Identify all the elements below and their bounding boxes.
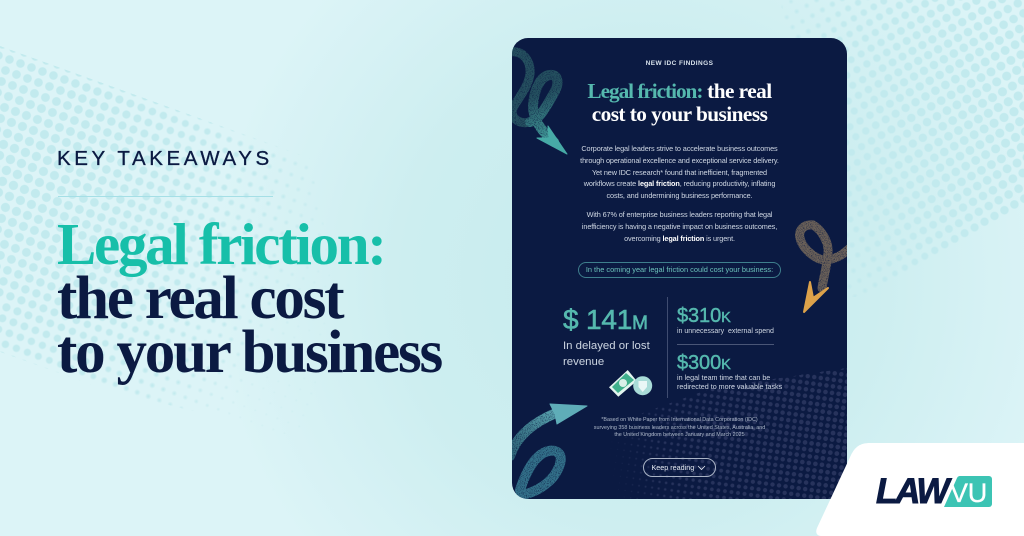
stat label: delayed or lost revenue: revenue [563,356,604,368]
intro paragraph: Corporate legal leaders strive to accelerate business outcomes [581,144,778,153]
card heading: cost to your business [592,102,767,126]
arrow head: blue [550,404,587,424]
intro paragraph: costs, and undermining business performance. [606,191,752,200]
footnote: *Based on White Paper from International Data Corporation (IDC) [601,417,758,423]
arrow: right amber [800,225,852,288]
arrow head: teal [537,126,567,154]
main heading [57,211,442,386]
card heading: Legal friction: the real [587,79,772,103]
stat label: delayed or lost revenue [563,340,650,368]
stat label: legal team time: in legal team time that can be [677,374,770,382]
vertical divider [667,297,668,398]
button: keep reading [643,458,716,477]
footnote: surveying 358 business leaders across the United States, Australia, and [594,425,765,431]
divider line [58,196,273,197]
second paragraph: inefficiency is having a negative impact on business outcomes, [582,222,777,231]
intro paragraph: Yet new IDC research* found that inefficient, fragmented [592,168,767,176]
horizontal divider [677,344,774,345]
white logo corner panel [816,443,1024,536]
button: keep reading: Keep reading [652,463,694,472]
icon: money and coin [609,370,652,397]
panel: dark report card [512,38,847,499]
stat: 141M: $ 141M [563,304,648,335]
footnote: the United Kingdom between January and March 2025 [614,432,745,438]
card heading [587,79,772,126]
intro paragraph: workflows create legal friction, reducing productivity, inflating [584,179,775,188]
second paragraph: overcoming legal friction is urgent. [624,234,735,242]
eyebrow: new IDC findings: NEW IDC FINDINGS [646,60,713,67]
stat label: external spend: in unnecessary external spend [677,328,774,334]
stat label: legal team time [677,374,782,391]
second paragraph: With 67% of enterprise business leaders reporting that legal [587,210,772,219]
arrow: top left teal [510,52,557,142]
logo: LawVu: VU [950,478,987,508]
second paragraph [582,210,777,242]
stat label: delayed or lost revenue: In delayed or lost [563,340,650,352]
callout pill [578,262,781,278]
stat label: legal team time: redirected to more valuable tasks [677,383,782,391]
eyebrow: key takeaways: KEY TAKEAWAYS [57,146,273,170]
main heading: the real cost [57,265,342,332]
intro paragraph [580,144,779,200]
main heading: Legal friction: [57,211,385,277]
arrow: bottom left blue [510,413,561,495]
decorative arrows and halftone in card [512,47,847,499]
stat: 300K: $300K [677,352,731,374]
footnote [594,417,765,438]
stat: 310K: $310K [677,305,731,327]
logo: LawVu: LAW [876,472,947,511]
intro paragraph: through operational excellence and exceptional service delivery. [580,156,779,165]
callout pill: In the coming year legal friction could cost your business: [586,265,773,274]
arrow head: amber [804,282,828,312]
logo: LawVu [876,472,992,511]
main heading: to your business [57,319,441,386]
